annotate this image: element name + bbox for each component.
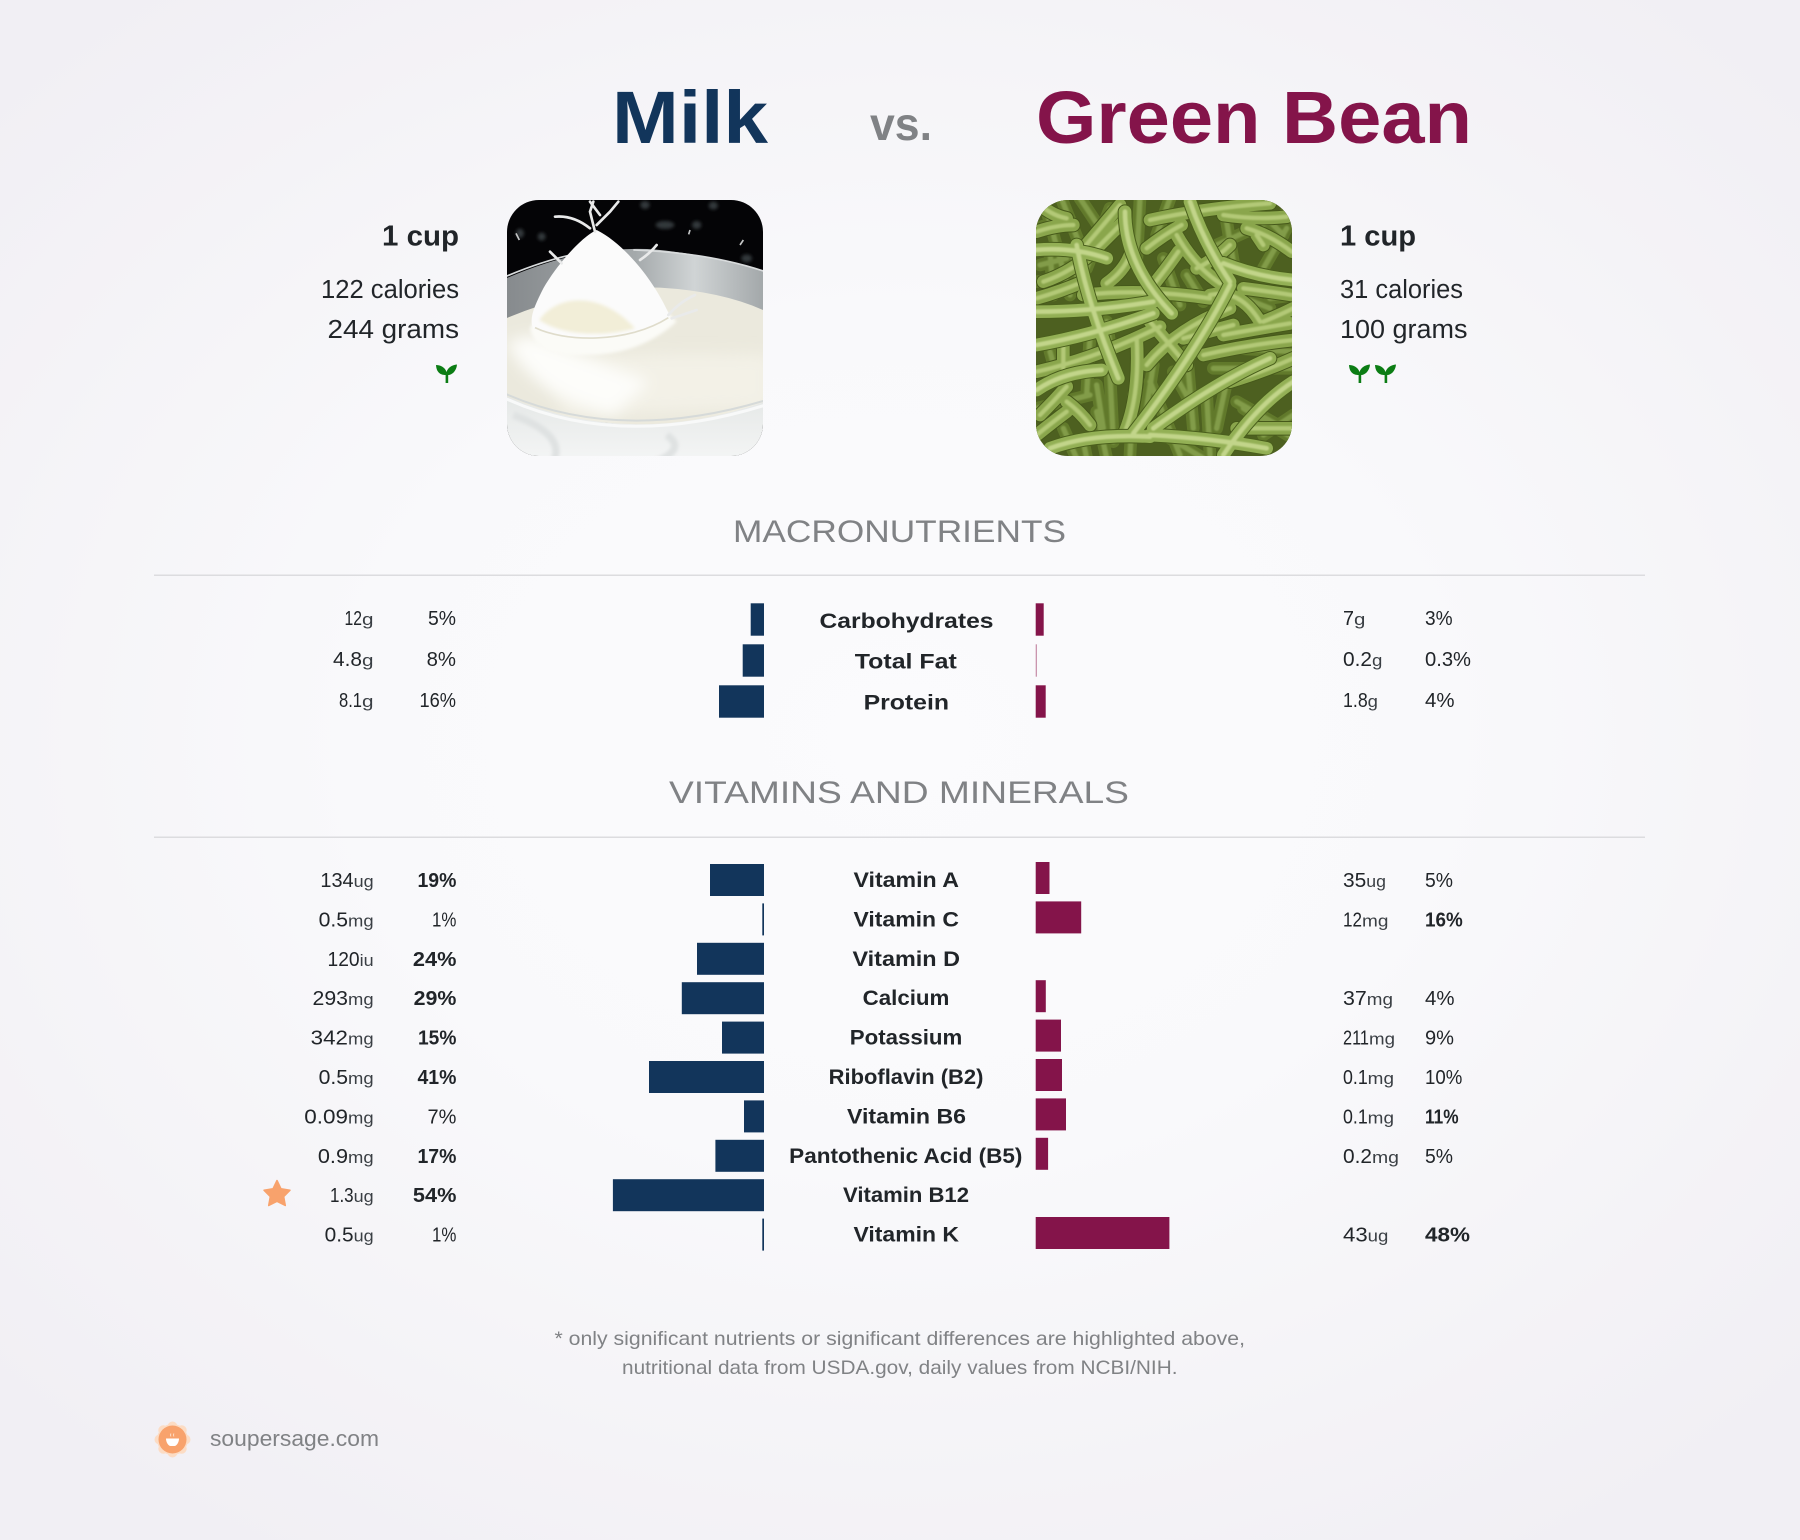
- row: Protein: [339, 685, 1454, 718]
- row: Protein: 16%: [420, 689, 456, 712]
- logo: soupersage icon: [154, 1422, 190, 1458]
- title: Milk: Milk: [612, 76, 769, 159]
- row: Calcium: [312, 980, 1454, 1014]
- row: Calcium: 4%: [1425, 987, 1454, 1010]
- row: Riboflavin (B2): mg: [348, 1069, 374, 1088]
- heading: vitamins and minerals: VITAMINS AND MINERALS: [669, 774, 1129, 810]
- row: Riboflavin (B2): 41%: [418, 1066, 456, 1089]
- row: Vitamin A: [320, 862, 1453, 896]
- serving size: 1 cup: [1340, 220, 1416, 252]
- row: Vitamin B6: mg: [348, 1108, 374, 1127]
- row: Total Fat: 0.3%: [1425, 648, 1471, 671]
- image: green beans photo: [1036, 200, 1292, 456]
- panel: green bean serving info: [1340, 220, 1468, 383]
- calories: 122 calories: [321, 276, 459, 304]
- row: Carbohydrates: g: [362, 610, 374, 629]
- row: Calcium: 293: [312, 987, 348, 1010]
- row: Vitamin C: mg: [348, 911, 374, 930]
- row: Vitamin K: 48%: [1425, 1224, 1470, 1247]
- row: Pantothenic Acid (B5): 0.9: [318, 1145, 348, 1168]
- row: Vitamin D: [328, 943, 960, 975]
- row: Protein: Protein: [864, 690, 949, 714]
- vs label: vs.: [870, 98, 932, 150]
- calories: 31 calories: [1340, 276, 1463, 304]
- row: Calcium: 37: [1343, 987, 1367, 1010]
- row: Vitamin B6: Vitamin B6: [847, 1104, 966, 1128]
- row: Vitamin C: 0.5: [319, 908, 348, 931]
- row: Vitamin B12: Vitamin B12: [843, 1183, 969, 1207]
- row: Vitamin D: Vitamin D: [852, 947, 960, 971]
- row: Protein: 1.8: [1343, 689, 1368, 712]
- row: Vitamin A: Vitamin A: [854, 868, 959, 892]
- row: Vitamin C: mg: [1362, 911, 1388, 930]
- row: Riboflavin (B2): 0.5: [319, 1066, 348, 1089]
- row: Vitamin K: 43: [1343, 1224, 1368, 1247]
- row: Carbohydrates: 5%: [428, 607, 456, 630]
- row: Riboflavin (B2): [319, 1059, 1462, 1093]
- image: milk splash photo: [507, 200, 763, 456]
- row: Carbohydrates: 12: [344, 607, 362, 630]
- row: Vitamin A: 134: [320, 869, 354, 892]
- icon: sprouts: [1349, 364, 1396, 383]
- row: Vitamin K: ug: [1368, 1227, 1388, 1246]
- row: Potassium: 342: [311, 1027, 348, 1050]
- row: Vitamin D: 24%: [413, 948, 456, 971]
- row: Pantothenic Acid (B5): mg: [348, 1148, 374, 1167]
- row: Vitamin B12: ug: [354, 1187, 374, 1206]
- website name: soupersage.com: [210, 1426, 379, 1451]
- row: Riboflavin (B2): Riboflavin (B2): [829, 1065, 983, 1089]
- row: Calcium: mg: [348, 990, 374, 1009]
- footnote: [554, 1328, 1245, 1379]
- row: Carbohydrates: Carbohydrates: [820, 609, 994, 633]
- grams: 244 grams: [328, 316, 459, 344]
- row: Total Fat: [333, 644, 1471, 677]
- row: Vitamin B12: 1.3: [330, 1184, 354, 1207]
- title: Green Bean: Green Bean: [1036, 76, 1472, 159]
- row: Total Fat: g: [362, 651, 374, 670]
- row: Total Fat: 0.2: [1343, 648, 1372, 671]
- row: Potassium: 15%: [418, 1027, 456, 1050]
- footnote: nutritional data from USDA.gov, daily values from NCBI/NIH.: [622, 1357, 1178, 1379]
- row: Vitamin A: 19%: [418, 869, 456, 892]
- row: Vitamin A: ug: [1366, 872, 1386, 891]
- row: Protein: 8.1: [339, 689, 362, 712]
- row: Pantothenic Acid (B5): 0.2: [1343, 1145, 1372, 1168]
- row: Vitamin B6: 11%: [1425, 1105, 1459, 1128]
- row: Vitamin D: iu: [360, 951, 374, 970]
- row: Vitamin C: 12: [1343, 908, 1362, 931]
- row: Vitamin K: 0.5: [325, 1224, 354, 1247]
- row: Potassium: 211: [1343, 1027, 1369, 1050]
- icon: sprout: [436, 364, 457, 383]
- row: Vitamin C: [319, 901, 1463, 935]
- row: Vitamin B12: 54%: [413, 1184, 456, 1207]
- row: Vitamin D: 120: [328, 948, 360, 971]
- row: Total Fat: g: [1372, 651, 1382, 670]
- row: Vitamin K: [325, 1217, 1470, 1251]
- row: Vitamin B12: [330, 1179, 969, 1211]
- row: Vitamin K: ug: [354, 1227, 374, 1246]
- row: Vitamin C: 1%: [432, 908, 456, 931]
- row: Pantothenic Acid (B5): [318, 1138, 1453, 1172]
- row: Vitamin B6: 0.09: [304, 1105, 348, 1128]
- row: Vitamin B6: [304, 1098, 1459, 1132]
- row: Carbohydrates: 7: [1343, 607, 1354, 630]
- row: Pantothenic Acid (B5): 5%: [1425, 1145, 1453, 1168]
- row: Pantothenic Acid (B5): Pantothenic Acid (B5): [789, 1144, 1022, 1168]
- row: Potassium: [311, 1020, 1454, 1054]
- row: Vitamin C: Vitamin C: [854, 907, 959, 931]
- row: Potassium: Potassium: [850, 1026, 962, 1050]
- row: Carbohydrates: [344, 603, 1453, 636]
- row: Vitamin A: ug: [354, 872, 374, 891]
- footnote: * only significant nutrients or significant differences are highlighted above,: [554, 1328, 1245, 1350]
- heading: macronutrients: MACRONUTRIENTS: [733, 513, 1066, 549]
- row: Vitamin A: 5%: [1425, 869, 1453, 892]
- row: Pantothenic Acid (B5): 17%: [418, 1145, 456, 1168]
- row: Vitamin B6: mg: [1368, 1108, 1394, 1127]
- row: Total Fat: Total Fat: [855, 650, 957, 674]
- grams: 100 grams: [1340, 316, 1468, 344]
- row: Protein: g: [1368, 692, 1378, 711]
- serving size: 1 cup: [382, 220, 459, 252]
- row: Protein: g: [362, 692, 374, 711]
- row: Carbohydrates: 3%: [1425, 607, 1453, 630]
- row: Riboflavin (B2): 10%: [1425, 1066, 1462, 1089]
- row: Potassium: 9%: [1425, 1027, 1454, 1050]
- row: Total Fat: 8%: [427, 648, 456, 671]
- row: Total Fat: 4.8: [333, 648, 362, 671]
- row: Riboflavin (B2): mg: [1368, 1069, 1394, 1088]
- row: Potassium: mg: [1369, 1030, 1395, 1049]
- row: Calcium: 29%: [414, 987, 456, 1010]
- row: Vitamin K: 1%: [432, 1224, 456, 1247]
- row: Calcium: Calcium: [863, 986, 949, 1010]
- row: Vitamin A: 35: [1343, 869, 1366, 892]
- row: Riboflavin (B2): 0.1: [1343, 1066, 1368, 1089]
- row: Potassium: mg: [348, 1030, 374, 1049]
- icon: star: [264, 1180, 290, 1206]
- row: Protein: 4%: [1425, 689, 1454, 712]
- row: Carbohydrates: g: [1354, 610, 1365, 629]
- row: Pantothenic Acid (B5): mg: [1372, 1148, 1399, 1167]
- row: Calcium: mg: [1367, 990, 1393, 1009]
- row: Vitamin B6: 7%: [428, 1105, 456, 1128]
- panel: milk serving info: [321, 220, 459, 383]
- row: Vitamin C: 16%: [1425, 908, 1463, 931]
- row: Vitamin B6: 0.1: [1343, 1105, 1368, 1128]
- row: Vitamin K: Vitamin K: [854, 1223, 960, 1247]
